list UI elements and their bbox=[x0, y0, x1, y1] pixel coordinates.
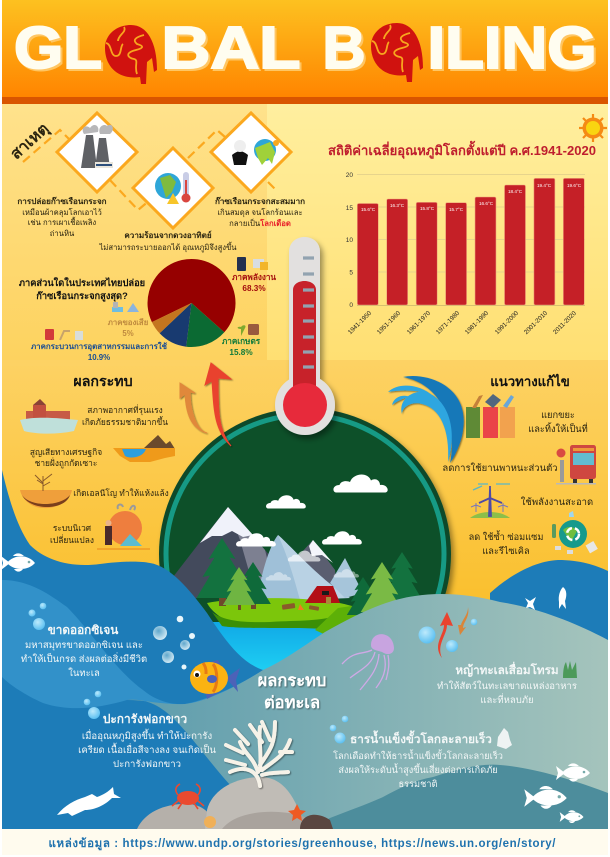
small fish bbox=[1, 553, 35, 572]
bar chart: average global temperature: 16.3°C bbox=[390, 203, 405, 208]
impact text: severe weather bbox=[82, 404, 168, 427]
red and orange sea arrows bbox=[438, 607, 468, 658]
solutions section bbox=[388, 373, 598, 556]
causes dashed connector bbox=[23, 130, 276, 210]
pie label: industry bbox=[31, 329, 168, 362]
bubbles bbox=[28, 603, 477, 744]
ocean text: oxygen bbox=[21, 623, 147, 679]
ocean text: melting ice: ธรรมชาติ bbox=[399, 779, 437, 789]
pie label: waste bbox=[108, 302, 149, 338]
pie label: agriculture: ภาคเกษตร bbox=[222, 337, 261, 346]
ocean text: melting ice bbox=[333, 730, 503, 789]
scene: lake bbox=[205, 622, 400, 700]
ocean text: coral bleaching: ปะการังฟอกขาว bbox=[103, 712, 187, 726]
ocean heading bbox=[258, 672, 326, 712]
pie label: waste: ภาคของเสีย bbox=[108, 317, 149, 327]
bar chart: average global temperature: 15.6°C bbox=[361, 207, 376, 212]
title: GLOBAL BOILING: ILING bbox=[430, 17, 598, 83]
impact text: ecosystem: ระบบนิเวศ bbox=[53, 523, 92, 533]
ocean text: seagrass: หญ้าทะเลเสื่อมโทรม bbox=[455, 661, 559, 677]
wave: left yellow boundary blue sea bbox=[2, 470, 263, 829]
bar chart: average global temperature: 15.7°C bbox=[449, 207, 464, 212]
title: GLOBAL BOILING: BAL bbox=[164, 17, 302, 83]
icon: seagrass bbox=[563, 661, 577, 678]
icon: bus stop bbox=[556, 445, 596, 484]
orange upward arrow bbox=[180, 383, 207, 433]
cause 1: factory diamond bbox=[57, 113, 137, 192]
solution text: sort waste: และทิ้งให้เป็นที่ bbox=[528, 422, 588, 434]
bar chart: average global temperature: 1971-1980 bbox=[435, 309, 461, 336]
ocean text: coral bleaching: ปะการังฟอกขาว bbox=[113, 759, 181, 770]
chart title: สถิติค่าเฉลี่ยอุณหภูมิโลกตั้งแต่ปี ค.ศ.1941-2020 bbox=[328, 140, 596, 159]
impacts heading: ผลกระทบ bbox=[73, 374, 133, 390]
jellyfish bbox=[342, 634, 394, 690]
cause 3 text bbox=[215, 196, 305, 228]
scene: grass island bbox=[207, 598, 365, 636]
ocean text: seagrass: ทำให้สัตว์ในทะเลขาดแหล่งอาหาร bbox=[437, 680, 577, 692]
ocean text: melting ice: ส่งผลให้ระดับน้ำสูงขึ้นเสี่ยงต่อการเกิดภัย bbox=[338, 762, 498, 776]
white fish silhouette bbox=[57, 787, 121, 816]
ocean heading: ต่อทะเล bbox=[264, 694, 320, 712]
solutions heading: แนวทางแก้ไข bbox=[490, 373, 570, 389]
impact text: ecosystem: เปลี่ยนแปลง bbox=[50, 534, 94, 545]
scene: mountains bbox=[173, 507, 363, 600]
bar chart: average global temperature: 15 bbox=[346, 205, 353, 212]
ocean text: melting ice: ธารน้ำแข็งขั้วโลกละลายเร็ว bbox=[350, 730, 492, 746]
title: GLOBAL BOILING bbox=[14, 15, 598, 83]
red upward arrow bbox=[205, 363, 231, 446]
icon: sun bbox=[579, 114, 607, 142]
ocean heading: ผลกระทบ bbox=[258, 672, 326, 690]
pie chart question: ภาคส่วนใดในประเทศไทยปล่อย bbox=[19, 277, 145, 288]
impacts section bbox=[20, 374, 175, 550]
icon: recycling bins bbox=[466, 394, 515, 438]
bar chart: average global temperature: 1951-1960 bbox=[376, 309, 402, 336]
pie chart: emissions by sector bbox=[148, 259, 236, 347]
cause 1 text: เหมือนผ้าคลุมโลกเอาไว้ bbox=[22, 208, 102, 217]
cause 1 text: การปล่อยก๊าซเรือนกระจก bbox=[17, 196, 107, 206]
title: GLOBAL BOILING: B bbox=[324, 17, 368, 83]
bar chart: average global temperature: 2001-2010 bbox=[523, 309, 549, 336]
cause 3 text: ก๊าซเรือนกระจกสะสมมาก bbox=[215, 196, 305, 206]
wave: lighter blue band bbox=[2, 580, 263, 715]
icon: water swirl bbox=[388, 376, 464, 463]
bar chart: average global temperature: 20 bbox=[346, 172, 353, 179]
pie chart question: ก๊าซเรือนกระจกสูงสุด? bbox=[36, 290, 128, 302]
header banner bbox=[2, 0, 608, 104]
orange fish bbox=[190, 660, 240, 699]
ocean text: oxygen: ขาดออกซิเจน bbox=[48, 623, 119, 637]
bar chart: average global temperature: 1981-1990 bbox=[464, 309, 490, 336]
pie label: energy bbox=[232, 257, 276, 293]
pie label: industry: 10.9% bbox=[88, 353, 110, 362]
bar chart: average global temperature: 10 bbox=[346, 237, 353, 244]
solution text: clean energy: ใช้พลังงานสะอาด bbox=[521, 496, 593, 508]
bar chart: average global temperature: 5 bbox=[349, 270, 353, 276]
scene: pine trees bbox=[196, 538, 422, 615]
source text: แหล่งข้อมูล : https://www.undp.org/stories/greenhouse, https://news.un.org/en/story/ bbox=[48, 837, 556, 851]
icon: changing ecosystem bbox=[97, 505, 150, 550]
bar chart: average global temperature: 0 bbox=[349, 302, 353, 309]
solution text: reduce reuse recycle bbox=[469, 529, 543, 556]
starfish bbox=[288, 804, 306, 821]
causes heading: สาเหตุ bbox=[8, 120, 53, 164]
impact text: economic loss: ชายฝั่งถูกกัดเซาะ bbox=[35, 457, 97, 469]
pie chart question bbox=[19, 277, 145, 302]
pie label: industry: ภาคกระบวนการอุตสาหกรรมและการใช้ bbox=[31, 341, 168, 352]
scene: clouds bbox=[236, 474, 388, 580]
bar chart: average global temperature: 2011-2020 bbox=[552, 310, 578, 336]
solution text: sort waste bbox=[528, 410, 588, 434]
ocean text: melting ice: โลกเดือดทำให้ธารน้ำแข็งขั้วโลกละลายเร็ว bbox=[333, 748, 503, 761]
ocean text: seagrass bbox=[437, 661, 577, 706]
bar chart: average global temperature: 19.4°C bbox=[537, 183, 552, 188]
impact text: ecosystem bbox=[50, 523, 94, 545]
icon: melting iceberg bbox=[497, 728, 512, 749]
white lobster bbox=[525, 597, 536, 610]
solution text: reduce reuse recycle: และรีไซเคิล bbox=[482, 546, 530, 556]
title: GLOBAL BOILING: B bbox=[322, 15, 366, 81]
cause 2 text: ไม่สามารถระบายออกได้ อุณหภูมิจึงสูงขึ้น bbox=[98, 241, 237, 253]
shell bbox=[204, 816, 216, 828]
bar chart: average global temperature: 1991-2000 bbox=[494, 309, 520, 336]
thermometer bbox=[275, 237, 335, 435]
page background panels bbox=[2, 104, 608, 610]
ocean text: coral bleaching: เครียด เนื้อเยื่อสีจางลง จนเกิดเป็น bbox=[78, 742, 216, 756]
impact text: severe weather: สภาพอากาศที่รุนแรง bbox=[87, 404, 163, 416]
coral bbox=[226, 722, 292, 786]
ocean text: oxygen: ทำให้เป็นกรด ส่งผลต่อสิ่งมีชีวิต bbox=[21, 652, 147, 665]
pie label: agriculture bbox=[222, 324, 261, 357]
pie label: agriculture: 15.8% bbox=[229, 348, 253, 357]
icon: wind turbines bbox=[470, 484, 510, 518]
white squid bbox=[559, 587, 566, 609]
icon: recycling globe bbox=[552, 511, 598, 554]
crab bbox=[172, 784, 204, 809]
cause 2 text bbox=[98, 230, 237, 253]
wave: teal sea bbox=[127, 594, 608, 829]
impact text: economic loss: สูญเสียทางเศรษฐกิจ bbox=[30, 447, 102, 458]
solution text: reduce reuse recycle: ลด ใช้ซ้ำ ซ่อมแซม bbox=[469, 529, 543, 542]
icon: eroded coast bbox=[113, 435, 175, 462]
central circle scene background bbox=[159, 408, 451, 700]
bar chart: average global temperature: 18.4°C bbox=[508, 189, 523, 194]
ocean text: coral bleaching: เมื่ออุณหภูมิสูงขึ้น ทำให้ปะการัง bbox=[82, 728, 212, 742]
cause 2: earth and thermometer diamond bbox=[133, 148, 213, 228]
cause 2 text: ความร้อนจากดวงอาทิตย์ bbox=[124, 230, 212, 240]
pie label: energy: ภาคพลังงาน bbox=[232, 273, 276, 282]
ocean text: oxygen: ในทะเล bbox=[68, 667, 100, 679]
cause 3: greenhouse gases diamond bbox=[211, 113, 291, 192]
ocean text: coral bleaching bbox=[78, 712, 216, 770]
footer bar bbox=[2, 829, 608, 855]
ocean text: seagrass: และที่หลบภัย bbox=[480, 693, 534, 706]
solution text: sort waste: แยกขยะ bbox=[541, 410, 575, 420]
icon: flooded building bbox=[20, 399, 78, 434]
scene: tent and campfire bbox=[282, 586, 340, 611]
title: GLOBAL BOILING: ILING bbox=[428, 15, 596, 81]
cause 1 text: เช่น การเผาเชื้อเพลิง bbox=[28, 216, 96, 227]
impact text: el nino: เกิดเอลนีโญ ทำให้แห้งแล้ง bbox=[73, 488, 169, 498]
ocean right fish group bbox=[524, 763, 590, 823]
bar chart: average global temperature: 19.6°C bbox=[567, 183, 582, 188]
pie label: waste: 5% bbox=[122, 329, 134, 338]
bar chart: average global temperature: 16.6°C bbox=[479, 201, 494, 206]
solution text: reduce private vehicles: ลดการใช้ยานพาหนะส่วนตัว bbox=[442, 462, 558, 474]
bar chart: average global temperature: 15.8°C bbox=[420, 206, 435, 211]
bar chart: average global temperature: 1961-1970 bbox=[406, 309, 432, 336]
impact text: economic loss bbox=[30, 447, 102, 469]
cause 3 text: เกินสมดุล จนโลกร้อนและ bbox=[217, 208, 303, 217]
impact text: severe weather: เกิดภัยธรรมชาติมากขึ้น bbox=[82, 416, 168, 427]
ocean text: oxygen: มหาสมุทรขาดออกซิเจน และ bbox=[25, 640, 143, 651]
icon: dry tree bbox=[20, 474, 72, 508]
cause 3 text: กลายเป็นโลกเดือด bbox=[229, 218, 291, 228]
title: GLOBAL BOILING: GL bbox=[14, 15, 102, 81]
bar chart: average global temperature bbox=[346, 172, 585, 336]
pie label: energy: 68.3% bbox=[242, 284, 266, 293]
wave: dark teal bottom bbox=[310, 765, 608, 829]
wave: top right blue bbox=[490, 560, 608, 650]
title: GLOBAL BOILING: GL bbox=[16, 17, 104, 83]
icon: melting globe left bbox=[105, 25, 157, 84]
title: GLOBAL BOILING: BAL bbox=[162, 15, 300, 81]
cause 1 text bbox=[17, 196, 107, 238]
cause 1 text: ถ่านหิน bbox=[50, 229, 75, 238]
rocks, coral and sea creatures bbox=[137, 722, 333, 829]
bar chart: average global temperature: 1941-1950 bbox=[347, 309, 373, 336]
icon: melting globe right bbox=[371, 23, 423, 82]
